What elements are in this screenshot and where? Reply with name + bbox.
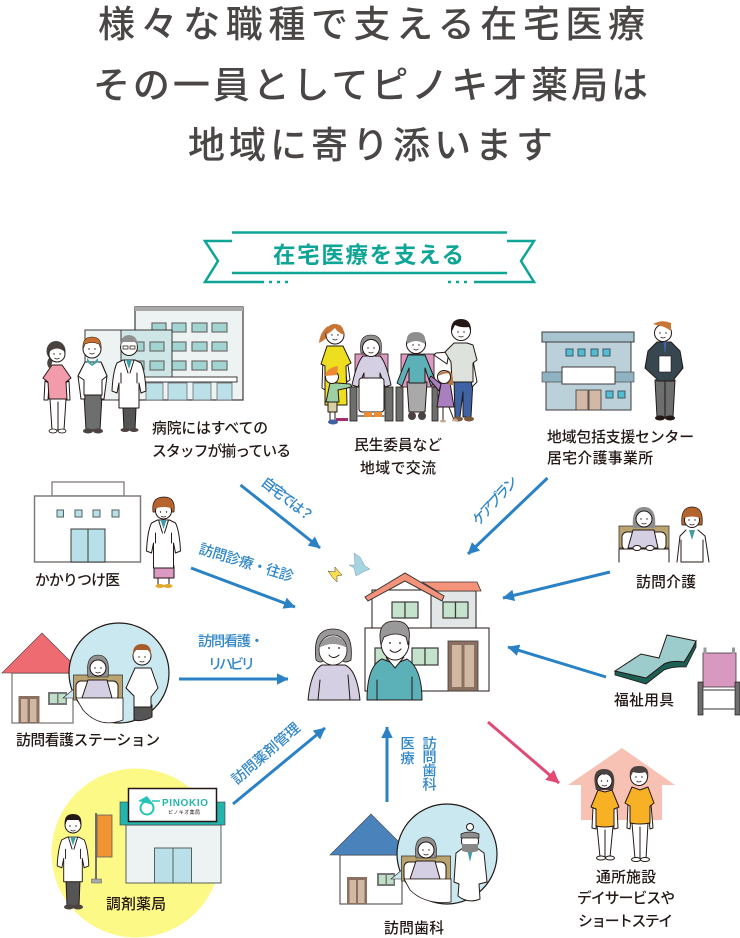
label: day service: デイサービスや [577,889,675,907]
label: community: 民生委員など [354,437,442,454]
icon: care manager [645,321,683,420]
icon: family doctor [146,497,180,588]
label: hospital [152,420,291,460]
label: support center [547,429,694,467]
yellow circle [52,768,220,938]
title: 様々な職種で支える在宅医療 [98,4,645,45]
label: day service: ショートステイ [578,914,673,930]
arrow label: nursing rehab [198,633,264,673]
arrow label: pharmacy management: 訪問薬剤管理 [228,719,304,788]
arrow: home care [503,572,610,598]
arrow label: nursing rehab: 訪問看護・ [198,633,264,650]
icon: nursing visit circle [63,623,169,723]
panel: visiting nurse station [2,623,169,749]
arrow label: home visit: 訪問診療・往診 [197,541,296,586]
icon: bed and patient [619,507,669,562]
panel: community [319,319,477,477]
label: family doctor: かかりつけ医 [35,572,120,589]
center: home with couple [308,553,489,700]
panel: family doctor [34,482,180,589]
icon: birds [328,553,370,582]
label: support center: 居宅介護事業所 [547,450,653,467]
label: community: 地域で交流 [360,460,436,477]
label: welfare equipment: 福祉用具 [614,692,674,709]
panel: hospital [43,307,291,460]
arrow: nursing [179,678,288,680]
icon: therapist [78,337,107,434]
arrow: pharmacy management [233,728,325,804]
icon: pharmacist [57,814,89,910]
icon: pharmacy building [120,788,225,883]
arrow label: nursing rehab: リハビリ [208,656,255,673]
panel: day service [568,748,675,930]
icon: staff man [625,766,654,862]
title: その一員としてピノキオ薬局は [93,65,648,106]
icon: hospital doctor [112,335,146,432]
label: nurse station: 訪問看護ステーション [16,732,160,749]
icon: grandfather in wheelchair [396,332,438,421]
panel: home dentistry [330,804,497,937]
icon: house [365,573,489,691]
label: hospital: 病院にはすべての [152,420,268,437]
label: support center: 地域包括支援センター [547,429,694,446]
icon: grandfather [367,621,422,700]
title: 地域に寄り添います [188,125,553,166]
arrow: equipment [508,647,606,677]
panel: welfare equipment [614,635,740,715]
icon: pink house [568,748,675,820]
panel: pharmacy [52,768,225,938]
label: dentistry: 訪問歯科 [384,920,444,937]
arrow: dentistry [386,727,388,802]
ribbon heading [205,232,534,282]
label: day service: 通所施設 [596,869,656,886]
arrow label: at home?: 自宅では？ [258,474,317,525]
arrow: home visit medical [191,568,295,607]
icon: dentist visit circle [391,804,497,904]
label: community [354,437,442,477]
arrow label: dental care [398,736,436,791]
arrow label: dental care: 訪問歯科 [420,736,436,791]
icon: pharmacy building: ピノキオ薬局 [168,809,200,816]
icon: support center building [542,332,634,410]
label: home visiting care: 訪問介護 [636,574,696,591]
arrow label: care plan: ケアプラン [470,472,521,530]
icon: mother and child [319,324,352,424]
icon: banner flag [92,813,112,883]
title [93,4,648,166]
panel: home visiting care [619,507,709,591]
icon: house [330,814,412,904]
arrow: home question [240,485,320,548]
icon: grandmother [308,629,360,700]
ribbon heading: 在宅医療を支える [273,243,464,268]
icon: wheelchair [698,648,740,715]
icon: mattress [615,635,696,684]
icon: clinic building [34,482,140,562]
panel: care support center [542,321,694,467]
icon: girl and father [429,319,477,422]
arrow: day service [488,722,559,783]
icon: staff woman [591,769,619,860]
icon: house [2,633,82,723]
icon: care worker [677,507,709,562]
icon: grandmother in wheelchair [350,335,393,421]
label: day service [577,869,675,930]
label: hospital: スタッフが揃っている [152,442,291,460]
icon: nurse [43,341,71,433]
label: pharmacy: 調剤薬局 [106,896,166,913]
arrow label: dental care: 医療 [398,736,414,765]
icon: hospital building [85,307,243,400]
icon: pharmacy building: PINOKIO [162,798,208,809]
arrow: care plan [468,478,548,554]
